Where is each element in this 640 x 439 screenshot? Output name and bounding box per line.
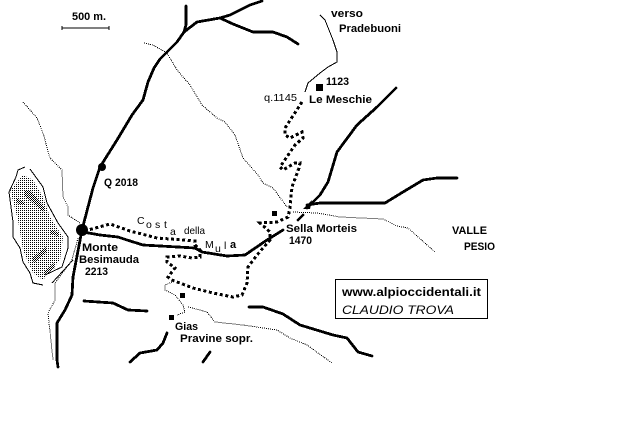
credit box: CLAUDIO TROVA <box>342 303 454 317</box>
label: Costa della Mula: C <box>137 215 145 227</box>
label: Costa della Mula: a <box>170 226 176 238</box>
thin trail: west of Besimauda <box>23 102 80 360</box>
label: Costa della Mula: della <box>184 225 205 237</box>
label: Valle Pesio: VALLE <box>452 225 487 237</box>
mountain massif <box>9 167 73 285</box>
thin trail: Pravine <box>165 282 332 363</box>
marker: Gias Pravine <box>169 315 174 320</box>
label: Gias Pravine sopr. <box>175 321 253 345</box>
marker: Pravine hut upper <box>180 293 185 298</box>
label: Monte Besimauda 2213 <box>79 242 140 278</box>
scale bar <box>62 11 109 30</box>
label: Costa della Mula: l <box>224 240 226 252</box>
short ridge near saddle <box>298 215 303 220</box>
label: Sella Morteis: Sella Morteis <box>286 223 357 235</box>
wedge at ridge junction <box>303 200 312 209</box>
scale bar: 500 m. <box>72 11 106 23</box>
label: Le Meschie: Le Meschie <box>309 94 372 106</box>
label: Sella Morteis: 1470 <box>289 235 312 247</box>
credit box: www.alpioccidentali.it <box>341 287 481 299</box>
thin trail: valley from north to Sella Morteis and Valle Pesio <box>144 43 435 252</box>
marker: Q 2018 <box>98 163 106 171</box>
label: Monte Besimauda 2213: Besimauda <box>79 254 140 266</box>
marker: Monte Besimauda summit <box>76 224 88 236</box>
credit box <box>336 280 488 318</box>
thin trail: verso Pradebuoni <box>305 15 337 92</box>
label: 1123: 1123 <box>326 76 349 88</box>
label: verso Pradebuoni: Pradebuoni <box>339 23 401 35</box>
dotted route <box>88 102 303 297</box>
lower ridge lines <box>84 301 372 362</box>
label: Valle Pesio <box>452 225 495 253</box>
ridge Costa della Mula <box>83 230 283 256</box>
label: Costa della Mula: a <box>230 239 237 251</box>
label: Costa della Mula: M <box>205 239 214 251</box>
ridge east of Sella Morteis <box>307 88 457 208</box>
label: Sella Morteis <box>286 223 357 247</box>
label: Costa della Mula: s <box>155 219 160 231</box>
label: Monte Besimauda 2213: 2213 <box>85 266 108 278</box>
label: q.1145: q.1145 <box>264 92 297 104</box>
main ridge line <box>57 1 298 367</box>
label: Gias Pravine sopr.: Gias <box>175 321 198 333</box>
label: Monte Besimauda 2213: Monte <box>82 242 118 254</box>
label: Q 2018: Q 2018 <box>104 177 138 189</box>
label: Gias Pravine sopr.: Pravine sopr. <box>180 333 253 345</box>
label: verso Pradebuoni <box>331 8 401 35</box>
marker: hut near Sella Morteis <box>272 211 277 216</box>
label: Costa della Mula <box>137 215 237 255</box>
label: verso Pradebuoni: verso <box>331 8 363 20</box>
label: Costa della Mula: u <box>215 243 221 255</box>
label: Valle Pesio: PESIO <box>464 241 495 253</box>
label: Costa della Mula: t <box>164 219 167 231</box>
label: Costa della Mula: o <box>146 219 152 231</box>
marker: Le Meschie <box>316 84 323 91</box>
